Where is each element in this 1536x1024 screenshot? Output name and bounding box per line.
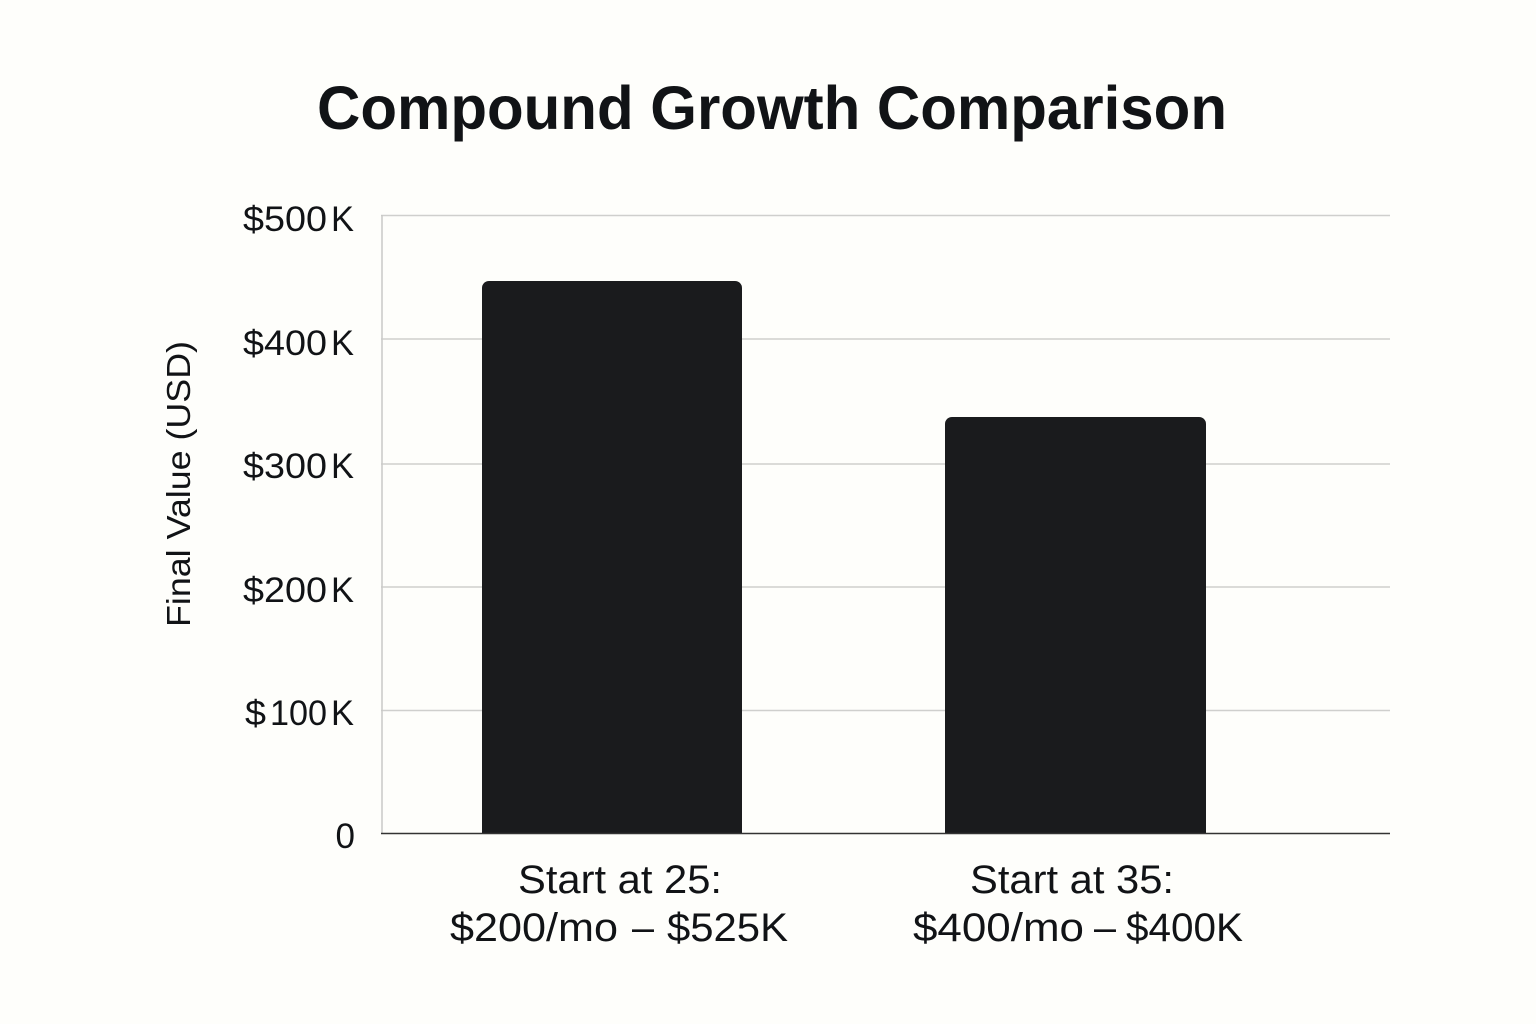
category label: start at 25: –	[632, 906, 655, 950]
y-axis labels: $	[245, 694, 266, 733]
bar: start at 25	[482, 281, 742, 834]
category label: start at 35: –	[1094, 906, 1117, 950]
category label: start at 25: Start at 25:	[518, 858, 722, 902]
y-axis labels: K	[331, 324, 354, 363]
category label: start at 35: $400K	[1126, 906, 1243, 950]
y-axis labels: K	[331, 694, 354, 733]
category label: start at 25: $200/mo	[450, 906, 618, 950]
y-axis labels: 100	[270, 694, 327, 733]
category label: start at 25: $525K	[667, 906, 788, 950]
bar: start at 35	[945, 417, 1206, 834]
y-axis labels: 0	[336, 817, 355, 856]
y-axis labels: $300	[243, 447, 327, 486]
bar chart	[381, 215, 1390, 834]
y-axis labels: K	[331, 200, 354, 239]
category label: start at 35: Start at 35:	[970, 858, 1174, 902]
y-axis title: Final Value (USD)	[161, 341, 198, 627]
title: Compound Growth Comparison	[317, 74, 1227, 142]
y-axis labels: K	[331, 571, 354, 610]
category label: start at 25	[450, 858, 788, 950]
category label: start at 35: $400/mo	[913, 906, 1084, 950]
y-axis labels: $500	[243, 200, 327, 239]
y-axis labels	[243, 200, 355, 856]
y-axis labels: $200	[243, 571, 327, 610]
y-axis labels: $400	[243, 324, 327, 363]
y-axis labels: K	[331, 447, 354, 486]
category label: start at 35	[913, 858, 1243, 950]
